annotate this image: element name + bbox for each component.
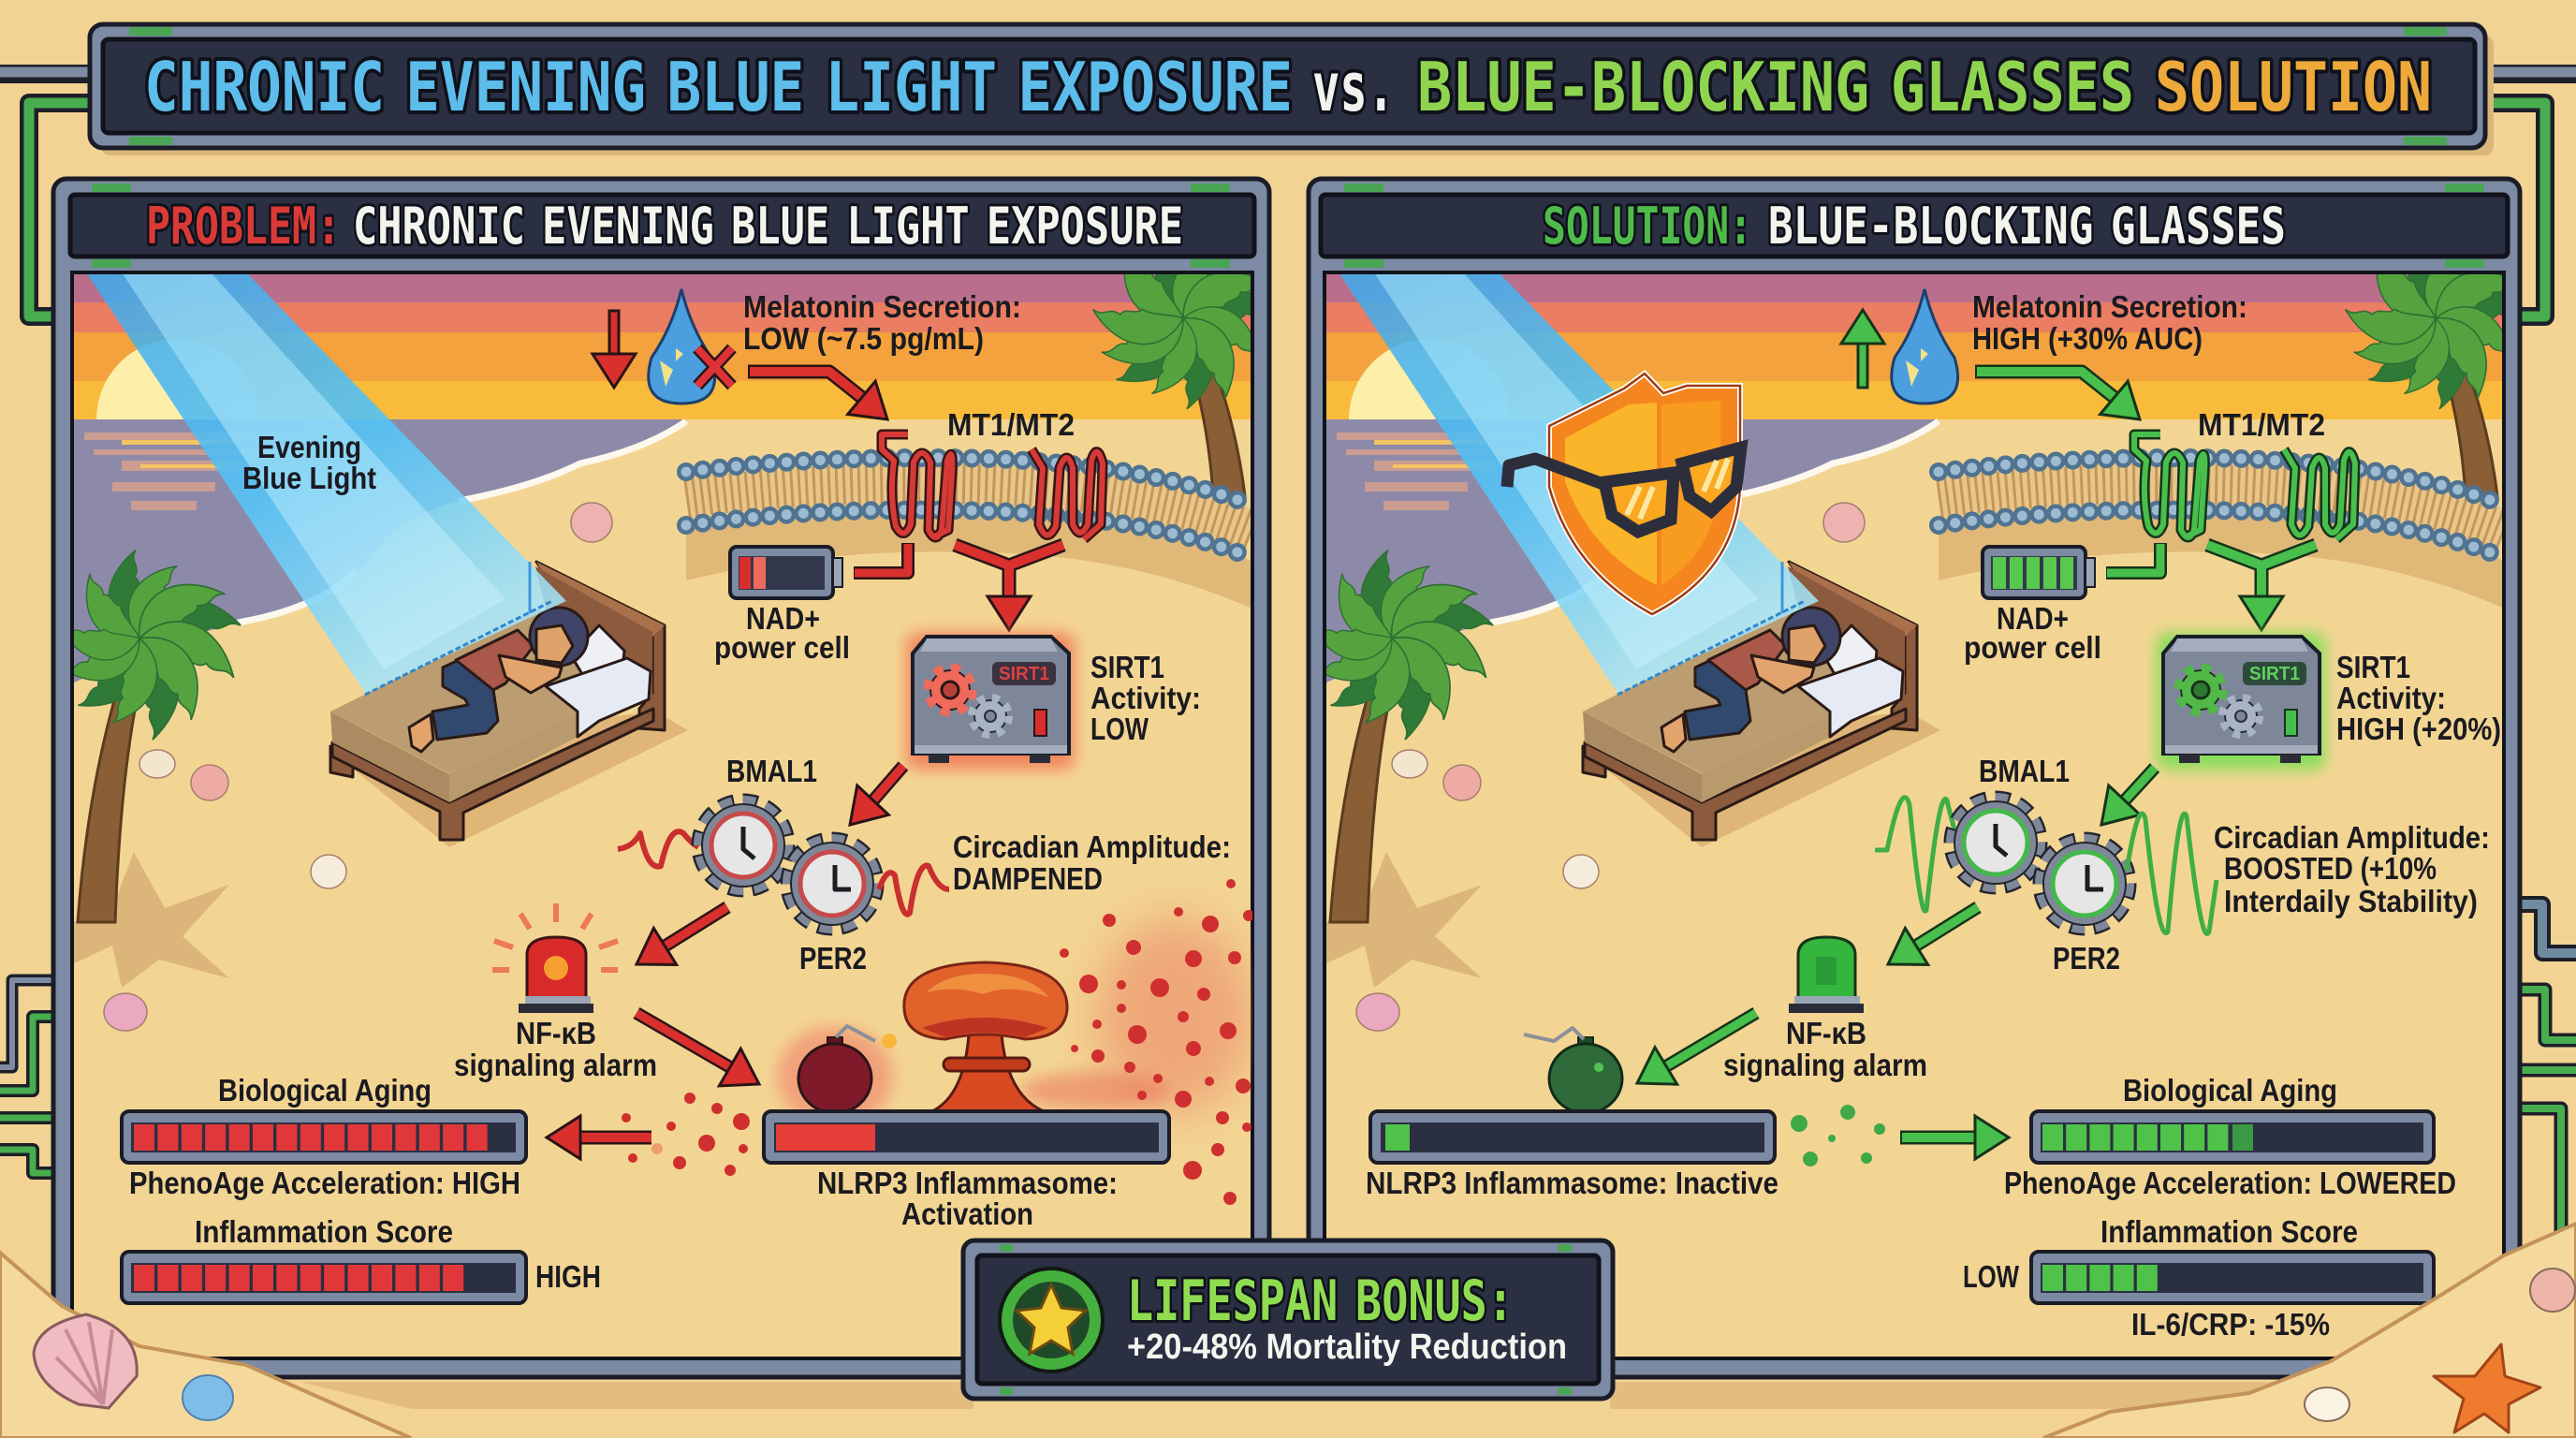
arrow: to biological aging	[547, 1116, 651, 1159]
label: phenoage lowered: PhenoAge Acceleration: LOWERED	[2004, 1166, 2456, 1200]
label: high: HIGH	[535, 1259, 601, 1294]
label: NF-kB: NF-κB	[516, 1016, 596, 1050]
title bar	[90, 24, 2494, 155]
arrow: SIRT1 to clocks	[2086, 768, 2155, 840]
icon: PER2 clock	[789, 841, 875, 927]
label: SIRT1 activity: SIRT1	[1090, 650, 1164, 684]
arrow: SIRT1 to clocks	[834, 766, 903, 840]
icon: down arrow	[593, 311, 636, 388]
arrow: to biological aging	[1900, 1116, 2009, 1159]
shell: pink right	[2530, 1269, 2575, 1312]
icon: MT1/MT2 receptors	[2134, 434, 2355, 539]
icon: melatonin drop	[1892, 289, 1958, 404]
sand dune: lower right	[1610, 1224, 2576, 1438]
icon: MT1/MT2 receptors	[882, 434, 1103, 539]
icon: melatonin drop with X	[649, 289, 732, 404]
arrow: clocks to alarm	[625, 907, 727, 983]
sand dune: lower left	[0, 1253, 973, 1438]
panel heading: SOLUTION:	[1543, 197, 1752, 256]
icon: SIRT1 machine low	[906, 633, 1075, 770]
label: NLRP3 inactive: NLRP3 Inflammasome: Inactive	[1366, 1166, 1778, 1200]
label: NLRP3 activation	[817, 1166, 1118, 1231]
panel: lifespan bonus	[963, 1240, 1613, 1399]
label: MT1/MT2: MT1/MT2	[947, 407, 1075, 442]
panel: problem	[53, 179, 1274, 1377]
title: glasses part: BLUE-BLOCKING GLASSES	[1417, 48, 2134, 126]
arrow: receptor to battery	[2106, 543, 2160, 573]
arrow: receptor to battery	[854, 543, 908, 573]
label: inflammation score: Inflammation Score	[2100, 1214, 2358, 1249]
panel: solution	[1309, 179, 2526, 1377]
pipes: right low	[2518, 904, 2576, 1236]
icon: star medal	[1000, 1269, 1103, 1372]
icon: BMAL1 clock	[1953, 800, 2039, 886]
icon: SIRT1 machine high	[2157, 633, 2325, 770]
label: melatonin: LOW (~7.5 pg/mL)	[743, 321, 984, 356]
glasses	[1507, 448, 1741, 532]
bar: NLRP3 inactive	[1370, 1111, 1775, 1163]
label: NAD+: power cell	[714, 630, 850, 665]
label: NF-kB: NF-κB	[1786, 1016, 1866, 1050]
icon: SIRT1 machine low: SIRT1	[999, 664, 1049, 684]
icon: shield with glasses	[1507, 374, 1741, 614]
green particles	[1791, 1105, 1885, 1167]
label: SIRT1 activity	[2336, 650, 2501, 746]
wave: boosted left	[1875, 798, 1958, 911]
label: NAD+	[1964, 601, 2101, 665]
arrow: alarm to inflammasome	[637, 1013, 769, 1103]
icon: red NF-kB alarm	[492, 903, 618, 1013]
label: SIRT1 activity: Activity:	[2336, 681, 2446, 715]
label: NLRP3 activation: NLRP3 Inflammasome:	[817, 1166, 1118, 1200]
label: NAD+: NAD+	[746, 601, 820, 636]
label: circadian amplitude: Circadian Amplitude:	[2214, 820, 2490, 855]
label: SIRT1 activity	[1090, 650, 1201, 746]
shell: blue	[183, 1375, 233, 1420]
panel heading: PROBLEM:	[146, 197, 341, 256]
beach scene: solution	[1313, 237, 2526, 1358]
icon: BMAL1 clock	[700, 802, 786, 888]
label: NAD+: NAD+	[1997, 601, 2069, 636]
panel frame	[1309, 179, 2520, 1377]
label: biological aging: Biological Aging	[2123, 1073, 2337, 1108]
label: SIRT1 activity: HIGH (+20%)	[2336, 712, 2501, 746]
label: BMAL1: BMAL1	[726, 754, 817, 788]
label: SIRT1 activity: SIRT1	[2336, 650, 2410, 684]
icon: SIRT1 machine high: SIRT1	[2249, 664, 2300, 684]
arrow: melatonin to receptor	[1975, 372, 2154, 436]
label: inflammation score: Inflammation Score	[195, 1214, 453, 1249]
beach scene: problem	[61, 237, 1274, 1358]
label: melatonin	[743, 289, 1021, 356]
arrow: fork to SIRT1	[955, 545, 1063, 630]
icon: PER2 clock	[2042, 841, 2128, 927]
wave: dampened left	[618, 831, 698, 867]
icon: low battery	[730, 547, 842, 598]
label: PER2: PER2	[799, 941, 867, 976]
icon: red bomb	[777, 1026, 897, 1127]
bar: inflammation score high	[122, 1252, 526, 1303]
label: biological aging: Biological Aging	[218, 1073, 432, 1108]
label: circadian amplitude: Interdaily Stability)	[2224, 884, 2478, 918]
label: melatonin	[1972, 289, 2247, 356]
bar: inflammation score low	[2031, 1252, 2434, 1303]
label: circadian amplitude	[953, 829, 1231, 896]
label: NAD+: power cell	[1964, 630, 2101, 665]
title: vs: vs.	[1312, 48, 1395, 126]
label: NAD+	[714, 601, 850, 665]
panel heading	[1543, 197, 2286, 256]
panel frame	[53, 179, 1269, 1377]
icon: mushroom cloud	[904, 962, 1067, 1111]
arrow: clocks to alarm	[1877, 907, 1978, 983]
icon: up arrow	[1841, 310, 1884, 388]
shell: large scallop	[34, 1314, 137, 1408]
label: IL-6/CRP: IL-6/CRP: -15%	[2131, 1307, 2330, 1342]
shell: white right	[2305, 1387, 2349, 1421]
icon: green NF-kB alarm	[1789, 937, 1864, 1013]
label: evening blue light	[242, 430, 376, 495]
label: BMAL1: BMAL1	[1979, 754, 2070, 788]
title: solution part: SOLUTION	[2155, 48, 2432, 126]
label: circadian amplitude: BOOSTED (+10%	[2224, 851, 2437, 886]
label: low: LOW	[1963, 1259, 2020, 1294]
label: circadian amplitude: DAMPENED	[953, 861, 1103, 896]
label: NF-kB: signaling alarm	[1723, 1048, 1927, 1082]
label: evening blue light: Blue Light	[242, 461, 376, 495]
arrow: alarm to bomb	[1626, 1013, 1756, 1102]
icon: starfish	[2434, 1344, 2540, 1432]
lifespan heading: LIFESPAN BONUS:	[1127, 1269, 1514, 1334]
pipes: left low	[0, 980, 56, 1173]
label: SIRT1 activity: Activity:	[1090, 681, 1201, 715]
bar: biological aging lowered	[2031, 1111, 2434, 1163]
arrow: melatonin to receptor	[748, 372, 901, 436]
icon: full battery	[1983, 547, 2095, 598]
red inflammation cloud	[1020, 879, 1254, 1205]
red particles	[622, 1093, 750, 1176]
title: problem part: CHRONIC EVENING BLUE LIGHT EXPOSURE	[144, 48, 1293, 126]
panel heading	[146, 197, 1183, 256]
pipes: left top	[0, 72, 90, 316]
arrow: fork to SIRT1	[2207, 545, 2316, 630]
wave: boosted right	[2127, 814, 2217, 933]
NLRP3 bar: problem	[764, 1111, 1169, 1163]
wave: dampened right	[879, 866, 949, 915]
icon: green bomb	[1524, 1028, 1622, 1113]
label: melatonin: Melatonin Secretion:	[1972, 289, 2247, 324]
panel heading: CHRONIC EVENING BLUE LIGHT EXPOSURE	[353, 197, 1183, 256]
label: melatonin: Melatonin Secretion:	[743, 289, 1021, 324]
bar: biological aging high	[122, 1111, 526, 1163]
label: MT1/MT2: MT1/MT2	[2198, 407, 2325, 442]
label: phenoage high: PhenoAge Acceleration: HIGH	[129, 1166, 520, 1200]
label: NF-kB	[454, 1016, 657, 1082]
lifespan value: +20-48% Mortality Reduction	[1127, 1328, 1567, 1367]
label: PER2: PER2	[2053, 941, 2120, 976]
label: circadian amplitude: Circadian Amplitude:	[953, 829, 1231, 864]
pipes: right top	[2485, 72, 2576, 316]
label: evening blue light: Evening	[257, 430, 361, 464]
label: NLRP3 activation: Activation	[901, 1196, 1033, 1231]
label: circadian amplitude	[2214, 820, 2490, 918]
label: melatonin: HIGH (+30% AUC)	[1972, 321, 2203, 356]
label: NF-kB: signaling alarm	[454, 1048, 657, 1082]
label: SIRT1 activity: LOW	[1090, 712, 1149, 746]
label: NF-kB	[1723, 1016, 1927, 1082]
panel heading: BLUE-BLOCKING GLASSES	[1768, 197, 2286, 256]
